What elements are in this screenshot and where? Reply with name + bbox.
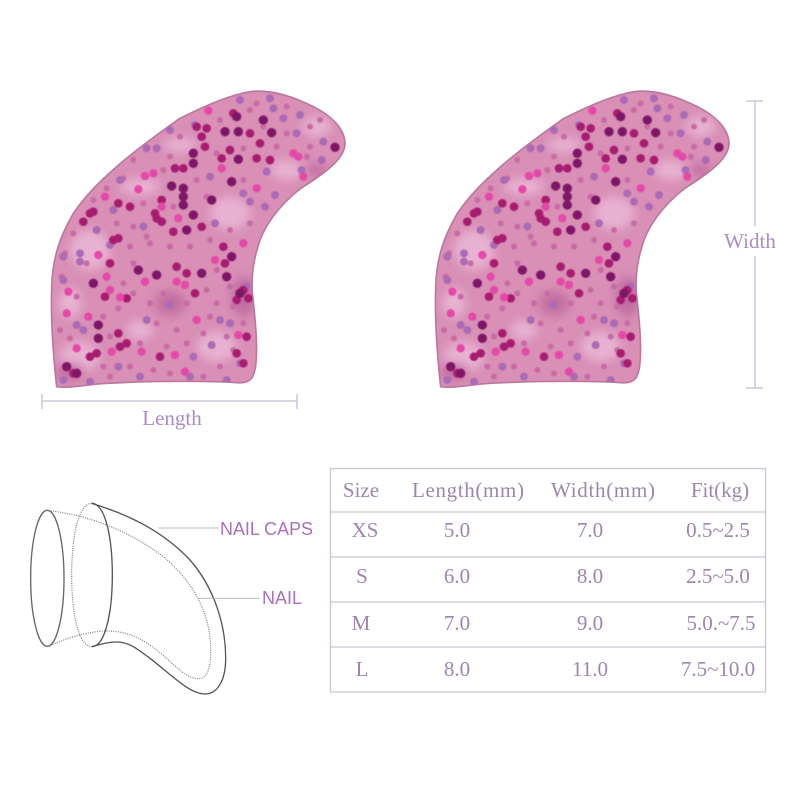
row S [356,564,750,588]
width dimension [724,101,776,388]
header row [343,478,749,502]
row L [356,657,755,681]
row L: 8.0 [444,657,470,681]
product photo: right nail cap [435,91,729,387]
width dimension: Width [724,229,776,253]
cap outline [92,503,226,694]
row M [352,611,756,635]
size table [330,468,766,692]
product photo: left nail cap [51,91,345,387]
row M: M [352,611,371,635]
row XS [352,518,750,542]
row L: L [356,657,368,681]
length dimension: Length [142,406,202,430]
length dimension [42,394,297,430]
row L: 7.5~10.0 [681,657,755,681]
nail outline, dotted [48,511,211,679]
row XS: 7.0 [577,518,603,542]
label: nail caps: NAIL CAPS [220,519,313,539]
row S: 2.5~5.0 [686,564,750,588]
nail base ellipse [31,510,64,646]
row M: 9.0 [577,611,603,635]
row S: 8.0 [577,564,603,588]
row XS: 0.5~2.5 [686,518,750,542]
nail cap diagram [31,503,260,694]
header row: Width(mm) [551,478,655,502]
cap base ellipse, hidden half [72,503,92,647]
table grid [330,468,766,692]
cap base ellipse, front half [92,503,112,647]
row M: 5.0.~7.5 [686,611,756,635]
header row: Fit(kg) [691,478,749,502]
label: nail: NAIL [262,588,302,608]
header row: Size [343,478,379,502]
row XS: 5.0 [444,518,470,542]
header row: Length(mm) [412,478,524,502]
row L: 11.0 [572,657,608,681]
row M: 7.0 [444,611,470,635]
leader lines [158,528,260,598]
row S: 6.0 [444,564,470,588]
row XS: XS [352,518,378,542]
row S: S [356,564,368,588]
